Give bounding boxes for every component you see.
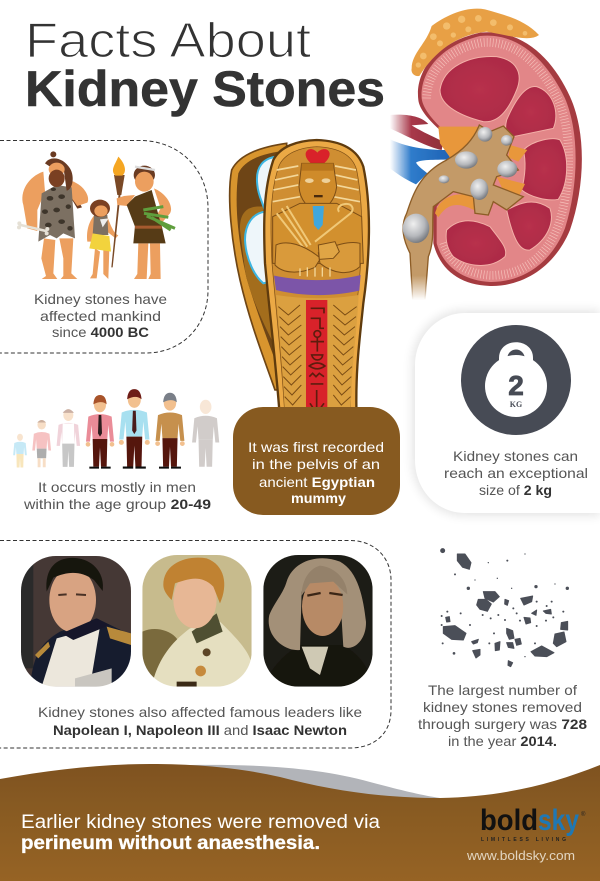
portraits [21,555,373,687]
caption box [233,407,400,515]
dashed border [0,540,391,748]
caption: kidney stones removed [423,699,582,715]
logo: Boldsky: bold [480,804,538,837]
caption: Napolean I, Napoleon III and Isaac Newton [53,722,347,738]
caption [34,291,167,340]
renal pelvis and ureter [403,125,523,300]
middle-aged man [155,393,185,469]
illustration: kidney with stones [390,9,582,300]
lower stripes [300,267,330,277]
caption [38,704,362,738]
headdress stripes [273,166,360,202]
caption: Kidney stones can [453,448,578,464]
cortex striations [427,42,569,275]
caption: The largest number of [428,682,577,698]
boy [32,420,51,467]
panel: weight [412,310,600,516]
caption: affected mankind [40,308,161,324]
caption: size of 2 kg [479,482,552,498]
caption: reach an exceptional [444,465,588,481]
heart crest [306,149,330,168]
red column [306,300,327,420]
panel: age group [13,389,219,512]
medulla chambers [440,57,567,265]
open coffin back [230,143,287,390]
brown wave [0,764,600,881]
portrait: Isaac Newton [263,555,373,687]
logo: Boldsky [466,804,586,863]
hilum fat [435,127,527,217]
caption: It was first recorded [248,439,384,455]
caveman [17,151,88,279]
logo: Boldsky: sky [538,804,579,837]
caption: in the pelvis of an [252,456,380,472]
inner lid [271,147,362,420]
face [299,163,337,210]
shoulders [273,203,363,263]
kidney body [418,32,582,286]
caption [444,448,588,498]
cavewoman [117,166,175,279]
lower body [276,295,359,420]
toddler [13,434,27,468]
caption: through surgery was 728 [418,716,587,732]
teen [57,409,80,467]
stones in kidney [403,127,517,243]
blood vessels [390,115,450,184]
caption [418,682,587,749]
adult man [119,389,150,469]
icon: 2 kg weight: 2 [508,370,524,401]
illustration: scattered stones [441,549,569,667]
panel: famous leaders [0,540,391,748]
illustration: sarcophagus [230,140,369,420]
fists [318,242,339,259]
footer message: Earlier kidney stones were removed via [21,812,380,833]
caption: since 4000 BC [52,324,149,340]
flail and crook [277,204,353,248]
logo: Boldsky: www.boldsky.com [466,848,575,863]
caption [248,439,384,506]
title [25,14,385,117]
dashed border [0,140,208,353]
logo: Boldsky: ® [581,811,586,818]
logo: Boldsky: LIMITLESS LIVING [481,837,566,843]
caption: within the age group 20-49 [23,496,211,512]
caption: in the year 2014. [448,733,557,749]
kidney cortex [422,36,576,282]
panel: mummy [230,140,400,515]
young man [86,395,114,469]
child [87,200,118,279]
illustration: cave family [17,151,175,279]
caption: ancient Egyptian [259,474,375,490]
caption: It occurs mostly in men [38,479,196,495]
coffin lid [264,140,369,420]
title: Facts About [25,14,311,68]
icon: 2 kg weight [461,325,571,435]
panel background [415,313,600,513]
footer message: perineum without anaesthesia. [21,833,320,854]
footer message [21,812,380,854]
torch [111,157,125,267]
zigzag panels [278,305,357,405]
illustration: men by age [13,389,219,469]
panel: largest number of stones [418,549,587,749]
caption [23,479,211,512]
grey wave [190,765,440,800]
panel: cavemen [0,140,208,353]
portrait: Napoleon I [21,556,131,687]
purple band [274,275,361,295]
footer band [0,764,600,881]
title: Kidney Stones [25,61,385,117]
blue beard [313,206,324,230]
old man [192,400,219,467]
caption: mummy [291,490,346,506]
adrenal fat [411,9,539,76]
hieroglyphs [309,308,325,413]
caption: Kidney stones have [34,291,167,307]
crossed arms [275,243,321,272]
caption: Kidney stones also affected famous leaders like [38,704,362,720]
icon: 2 kg weight: KG [510,400,522,409]
panel shadow [412,310,600,516]
portrait: Napoleon III [142,555,252,687]
